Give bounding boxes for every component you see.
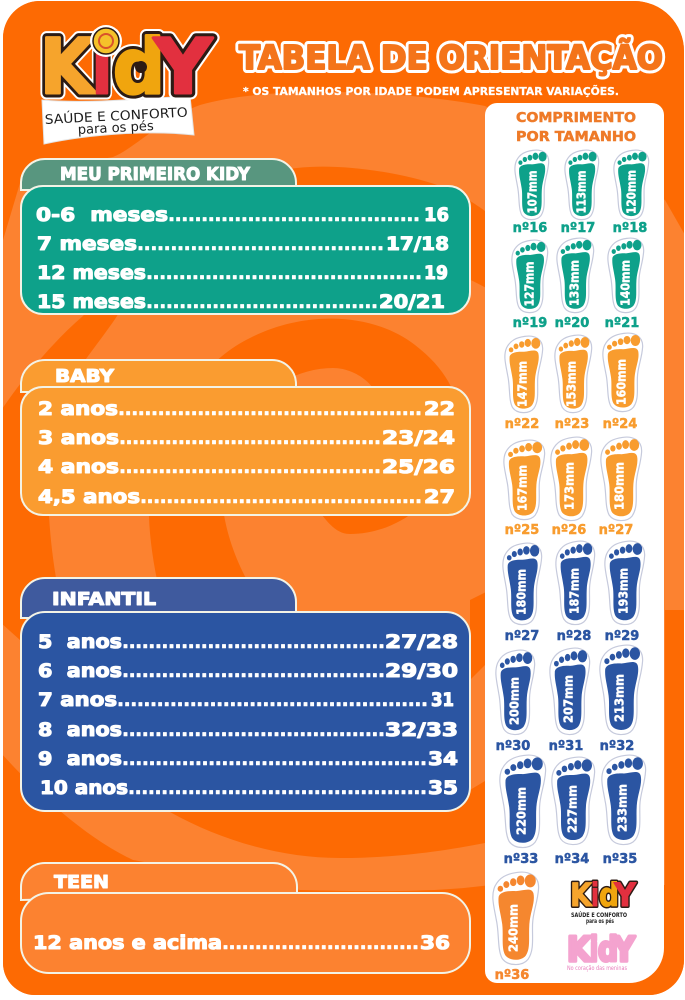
row 6 anos: 29/30 [385,661,458,682]
row 6 anos: ........................................ [122,661,385,682]
row 5 anos: ........................................ [122,632,385,653]
panel: comprimento por tamanho [485,103,664,983]
foot 127mm nº19: 127mm [522,262,536,306]
small logo: Kidy saúde e conforto [570,876,637,925]
foot 140mm nº21: 140mm [618,260,632,306]
foot 233mm nº35 [602,755,646,867]
title: TABELA DE ORIENTAÇÃO [239,37,663,77]
foot 127mm nº19 [512,240,548,331]
row 2 anos: 2 anos [38,399,118,420]
logo letters: Y [153,22,213,111]
row 0-6 meses [36,205,449,226]
tab: baby [21,360,296,392]
logo: Kidy [40,22,213,144]
logo letters: K [40,22,97,111]
logo letters: d [113,22,165,111]
foot 187mm nº28: 187mm [566,568,582,614]
logo banner [42,96,194,144]
row 6 anos: 6 anos [38,661,122,682]
panel: infantil [21,578,470,811]
foot 120mm nº18 [613,150,649,236]
row 9 anos: .............................................. [122,749,427,770]
small logo: Kidy saúde e conforto: Y [613,876,637,914]
panel: baby [21,360,470,515]
logo letters [40,22,213,111]
row 4,5 anos: 4,5 anos [38,487,140,508]
foot 187mm nº28: nº28 [557,629,591,644]
row 9 anos: 9 anos [38,749,122,770]
foot 133mm nº20: 133mm [566,260,582,306]
logo letters: Y [153,22,213,111]
foot 120mm nº18: 120mm [624,170,638,214]
foot 147mm nº22: 147mm [514,361,530,407]
row 10 anos: 10 anos [40,778,128,799]
heading: POR TAMANHO [516,129,636,145]
small logo: Kidy saúde e conforto: i [591,876,599,914]
tab: baby: BABY [55,366,115,387]
small logo: Kidy saúde e conforto: d [599,876,619,914]
foot 127mm nº19: nº19 [513,316,547,331]
foot 173mm nº26: nº26 [552,523,586,538]
foot 153mm nº23 [555,335,592,432]
foot 120mm nº18: nº18 [613,221,647,236]
logo banner: para os pés [77,119,154,138]
foot 240mm nº36 [493,872,539,983]
heading: COMPRIMENTO [516,110,636,126]
foot 140mm nº21 [605,238,644,331]
small logo: Kidy saúde e conforto: SAÚDE E CONFORTO [571,910,627,919]
row 12 anos e acima [33,933,450,954]
logo letters: i [92,22,112,111]
row 4 anos [38,457,455,478]
tab: teen [21,863,297,900]
foot 113mm nº17: 113mm [574,170,588,214]
logo letters: K [40,22,97,111]
foot 167mm nº25 [504,440,545,538]
row 4 anos: 25/26 [382,457,455,478]
row 0-6 meses: 0-6 meses [36,205,168,226]
foot 207mm nº31 [549,648,590,754]
foot 220mm nº33: nº33 [504,852,538,867]
foot 213mm nº32 [600,645,643,754]
tab: teen: TEEN [54,872,109,893]
row 7 anos: 7 anos [38,690,117,711]
tab: meu primeiro kidy [21,159,296,190]
small logo: Kidy pink: Y [612,930,635,970]
logo letters: d [113,22,165,111]
row 15 meses: 20/21 [379,292,445,313]
panel: teen [21,863,470,973]
row 7 meses: 17/18 [386,234,449,255]
foot 160mm nº24 [603,333,643,432]
title: TABELA DE ORIENTAÇÃO [239,37,663,77]
row 4 anos: ........................................ [119,457,381,478]
logo letters: i [92,22,112,111]
row 12 anos e acima: 12 anos e acima [33,933,222,954]
foot 200mm nº30 [496,650,535,754]
row 4,5 anos: 27 [424,487,455,508]
row 6 anos [38,661,458,682]
table body [21,893,470,973]
row 5 anos: 27/28 [385,632,458,653]
foot 233mm nº35: 233mm [614,784,630,832]
row 5 anos [38,632,458,653]
row 8 anos: 32/33 [385,720,458,741]
foot 133mm nº20: nº20 [555,316,589,331]
foot 180mm nº27 orange: nº27 [599,523,633,538]
foot 153mm nº23: 153mm [564,361,578,407]
small logo: Kidy pink: No coração das meninas [567,965,627,972]
foot 107mm nº16: nº16 [513,221,547,236]
small logo: Kidy saúde e conforto: Y [613,876,637,914]
tab: meu primeiro kidy: MEU PRIMEIRO KIDY [60,164,251,185]
subtitle note: * OS TAMANHOS POR IDADE PODEM APRESENTAR VARIAÇÕES. [243,85,619,98]
foot 160mm nº24: nº24 [603,417,637,432]
foot 173mm nº26: 173mm [562,462,576,510]
row 3 anos: 3 anos [38,428,119,449]
small logo: Kidy saúde e conforto: para os pés [586,918,614,925]
logo letters: i [92,22,112,111]
small logo: Kidy saúde e conforto: K [570,876,593,914]
row 15 meses: 15 meses [37,292,146,313]
foot 180mm nº27 blue: 180mm [514,569,528,615]
tab: infantil: INFANTIL [52,589,156,610]
table body [21,387,470,515]
logo letters: Y [153,22,213,111]
small logo: Kidy saúde e conforto: K [570,876,593,914]
row 15 meses [37,292,445,313]
row 7 anos: ............................................... [117,690,428,711]
foot 107mm nº16 [513,150,549,236]
foot 147mm nº22: nº22 [505,417,539,432]
foot 213mm nº32: nº32 [600,739,634,754]
row 3 anos: ........................................ [119,428,381,449]
foot 180mm nº27 blue: nº27 [505,629,539,644]
row 0-6 meses: ...................................... [168,205,420,226]
row 3 anos [38,428,455,449]
row 9 anos: 34 [428,749,458,770]
table body [21,612,470,811]
row 8 anos: 8 anos [38,720,122,741]
row 2 anos: 22 [424,399,455,420]
row 7 anos: 31 [431,690,454,711]
foot 180mm nº27 orange [599,437,642,538]
foot 160mm nº24: 160mm [614,359,628,405]
row 12 meses [37,263,448,284]
foot 233mm nº35: nº35 [603,852,637,867]
small logo: Kidy pink: i [590,930,598,970]
small logo: Kidy pink: K [567,930,592,970]
foot 227mm nº34 [552,757,595,867]
row 3 anos: 23/24 [382,428,455,449]
foot 200mm nº30: 200mm [506,677,522,725]
row 12 meses: .......................................... [146,263,422,284]
foot 153mm nº23: nº23 [555,417,589,432]
row 4,5 anos [38,487,455,508]
foot 147mm nº22 [505,336,543,432]
row 2 anos: .............................................. [118,399,422,420]
row 7 meses: ..................................... [137,234,384,255]
row 7 meses [37,234,449,255]
small logo: Kidy pink: d [598,930,618,970]
row 8 anos: ........................................ [122,720,385,741]
row 10 anos: 35 [428,778,458,799]
foot 200mm nº30: nº30 [496,739,530,754]
heading [516,110,636,145]
row 4,5 anos: ........................................... [140,487,422,508]
logo letters: K [40,22,97,111]
logo letters: d [113,22,165,111]
row 5 anos: 5 anos [38,632,122,653]
foot 227mm nº34: nº34 [555,852,589,867]
foot 207mm nº31: 207mm [560,675,576,723]
row 7 meses: 7 meses [37,234,137,255]
foot 180mm nº27 blue [503,543,542,644]
row 0-6 meses: 16 [424,205,449,226]
foot 220mm nº33 [500,755,546,867]
foot 193mm nº29: 193mm [616,568,630,614]
row 4 anos: 4 anos [38,457,119,478]
foot 227mm nº34: 227mm [564,785,580,833]
foot 193mm nº29 [605,541,645,644]
row 12 anos e acima: 36 [420,933,450,954]
tab: infantil [21,578,296,618]
foot 173mm nº26 [551,437,592,538]
foot 140mm nº21: nº21 [605,316,639,331]
row 10 anos: ............................................. [128,778,427,799]
foot 207mm nº31: nº31 [549,739,583,754]
foot 167mm nº25: 167mm [514,465,530,511]
small logo: Kidy saúde e conforto: d [599,876,619,914]
row 15 meses: ................................... [146,292,378,313]
foot 107mm nº16: 107mm [524,170,540,214]
foot 240mm nº36: nº36 [495,968,529,983]
foot 240mm nº36: 240mm [506,904,520,952]
row 12 anos e acima: .............................. [222,933,419,954]
foot 113mm nº17 [561,150,599,236]
small logo: Kidy pink [567,930,635,972]
foot 220mm nº33: 220mm [514,787,528,835]
small logo: Kidy saúde e conforto: i [591,876,599,914]
foot 113mm nº17: nº17 [561,221,595,236]
table body [21,186,470,314]
row 12 meses: 19 [424,263,448,284]
foot 213mm nº32: 213mm [612,674,626,722]
foot 167mm nº25: nº25 [505,523,539,538]
foot 180mm nº27 orange: 180mm [612,462,626,510]
row 8 anos [38,720,458,741]
foot 187mm nº28 [556,541,595,644]
panel: meu primeiro kidy [21,159,470,314]
foot 133mm nº20 [555,238,594,331]
row 12 meses: 12 meses [37,263,146,284]
foot 193mm nº29: nº29 [605,629,639,644]
logo banner: SAÚDE E CONFORTO [44,105,188,128]
